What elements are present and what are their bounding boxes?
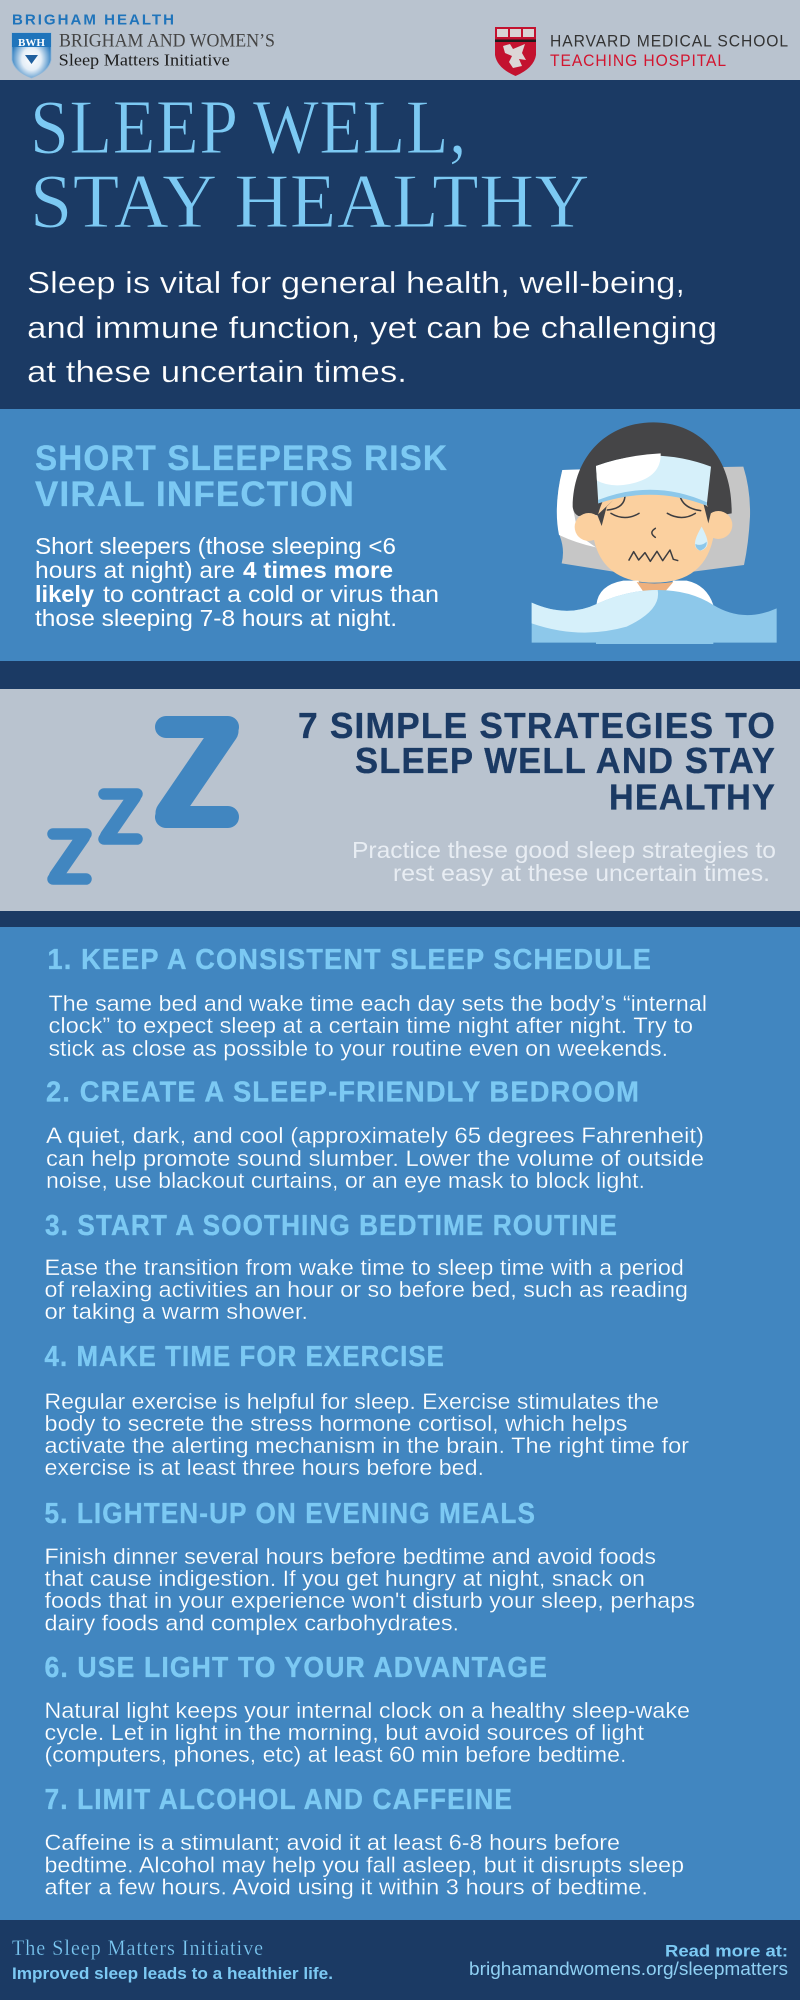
face bbox=[575, 493, 732, 583]
strategy 5: that cause indigestion. If you get hungry at night, snack on bbox=[44, 1566, 645, 1591]
text: practice strategies: rest easy at these uncertain times. bbox=[393, 860, 770, 886]
heading: short sleepers: VIRAL INFECTION bbox=[35, 475, 355, 514]
heading: 7 strategies: SLEEP WELL AND STAY bbox=[355, 740, 776, 781]
intro text: Sleep is vital for general health, well-being, bbox=[27, 265, 685, 300]
strategy 2: A quiet, dark, and cool (approximately 65 degrees Fahrenheit) bbox=[46, 1123, 704, 1148]
footer tagline: The Sleep Matters Initiative bbox=[12, 1935, 264, 1960]
strategy 7 bbox=[44, 1784, 684, 1900]
heading: short sleepers bbox=[35, 439, 448, 514]
strategy 4: activate the alerting mechanism in the brain. The right time for bbox=[44, 1433, 690, 1458]
heading: short sleepers: SHORT SLEEPERS RISK bbox=[35, 439, 448, 478]
strategy 6 bbox=[44, 1652, 690, 1767]
panel: short sleepers bbox=[0, 409, 800, 661]
footer link: brighamandwomens.org/sleepmatters bbox=[469, 1958, 788, 1979]
icon: zzz bbox=[53, 727, 228, 879]
logo: Harvard Medical School: TEACHING HOSPITAL bbox=[550, 51, 727, 70]
strategy 3: 3. START A SOOTHING BEDTIME ROUTINE bbox=[45, 1210, 618, 1242]
cold towel bbox=[596, 453, 711, 506]
text: short sleepers body: 4 times more bbox=[243, 557, 393, 583]
logo: Brigham Health: BRIGHAM AND WOMEN’S bbox=[59, 32, 275, 52]
text: practice strategies bbox=[352, 837, 776, 886]
strategy 4: Regular exercise is helpful for sleep. Exercise stimulates the bbox=[44, 1389, 659, 1414]
intro text bbox=[27, 265, 717, 389]
heading: 7 strategies: HEALTHY bbox=[609, 776, 776, 818]
strategy 1: The same bed and wake time each day sets the body’s “internal bbox=[48, 991, 707, 1016]
strategy 6: (computers, phones, etc) at least 60 min before bedtime. bbox=[44, 1742, 626, 1767]
strategy 1: clock” to expect sleep at a certain time night after night. Try to bbox=[48, 1013, 693, 1038]
text: practice strategies: Practice these good sleep strategies to bbox=[352, 837, 776, 863]
icon: BWH shield bbox=[12, 33, 51, 78]
text: short sleepers body bbox=[35, 533, 439, 631]
strategy 7: after a few hours. Avoid using it within 3 hours of bedtime. bbox=[44, 1874, 648, 1900]
strategy 4: exercise is at least three hours before bed. bbox=[44, 1455, 484, 1480]
strategy 4: body to secrete the stress hormone cortisol, which helps bbox=[44, 1411, 628, 1436]
illustration: sick sleeper bbox=[532, 422, 777, 644]
strategy 4 bbox=[44, 1341, 690, 1480]
strategy 5: dairy foods and complex carbohydrates. bbox=[44, 1610, 459, 1636]
strategy 3: or taking a warm shower. bbox=[44, 1299, 308, 1324]
strategy 6: 6. USE LIGHT TO YOUR ADVANTAGE bbox=[44, 1652, 548, 1684]
footer link bbox=[469, 1942, 788, 1979]
strategy 3: of relaxing activities an hour or so before bed, such as reading bbox=[44, 1277, 688, 1302]
strategy 2: noise, use blackout curtains, or an eye mask to block light. bbox=[46, 1168, 645, 1193]
intro text: at these uncertain times. bbox=[27, 354, 407, 389]
strategy 3: Ease the transition from wake time to sleep time with a period bbox=[44, 1255, 684, 1280]
blanket bbox=[532, 590, 777, 644]
icon: Harvard shield bbox=[495, 27, 536, 76]
logo: Brigham Health: BRIGHAM HEALTH bbox=[12, 12, 176, 28]
strategy 5: 5. LIGHTEN-UP ON EVENING MEALS bbox=[44, 1498, 536, 1530]
footer link: Read more at: bbox=[665, 1942, 788, 1960]
panel: logo header bbox=[0, 0, 800, 80]
strategy 6: Natural light keeps your internal clock on a healthy sleep-wake bbox=[44, 1698, 690, 1723]
text: short sleepers body: likely bbox=[35, 581, 94, 607]
strategy 2: 2. CREATE A SLEEP-FRIENDLY BEDROOM bbox=[46, 1077, 640, 1109]
icon: BWH shield: BWH bbox=[18, 38, 45, 49]
heading: 7 strategies: 7 SIMPLE STRATEGIES TO bbox=[298, 705, 776, 746]
panel: 7 strategies intro bbox=[0, 689, 800, 911]
text: short sleepers body: to contract a cold or virus than bbox=[103, 581, 439, 607]
text: short sleepers body: Short sleepers (those sleeping <6 bbox=[35, 533, 396, 559]
logo: Harvard Medical School bbox=[495, 27, 789, 76]
strategy 1: 1. KEEP A CONSISTENT SLEEP SCHEDULE bbox=[48, 944, 652, 976]
strategy 5: Finish dinner several hours before bedtime and avoid foods bbox=[44, 1544, 656, 1569]
footer tagline: Improved sleep leads to a healthier life. bbox=[12, 1965, 333, 1983]
panel: title banner bbox=[0, 80, 800, 409]
panel: footer bbox=[0, 1920, 800, 2000]
strategy 3 bbox=[44, 1210, 688, 1324]
hair bbox=[573, 422, 732, 526]
title: SLEEP WELL, bbox=[30, 84, 467, 170]
divider band bbox=[0, 911, 800, 927]
strategy 6: cycle. Let in light in the morning, but avoid sources of light bbox=[44, 1720, 645, 1745]
footer tagline bbox=[12, 1935, 333, 1983]
logo: Brigham Health bbox=[12, 12, 275, 78]
neck and shirt bbox=[596, 581, 713, 605]
panel: strategies list bbox=[0, 927, 800, 1920]
strategy 1: stick as close as possible to your routine even on weekends. bbox=[48, 1036, 668, 1061]
strategy 7: 7. LIMIT ALCOHOL AND CAFFEINE bbox=[44, 1784, 513, 1816]
strategy 2 bbox=[46, 1077, 704, 1193]
pillow bbox=[557, 467, 750, 572]
title bbox=[30, 84, 590, 244]
logo: Brigham Health: Sleep Matters Initiative bbox=[59, 51, 230, 70]
title: STAY HEALTHY bbox=[30, 158, 590, 244]
divider band bbox=[0, 661, 800, 689]
strategy 4: 4. MAKE TIME FOR EXERCISE bbox=[44, 1341, 445, 1373]
strategy 1 bbox=[48, 944, 707, 1061]
intro text: and immune function, yet can be challenging bbox=[27, 310, 717, 345]
text: short sleepers body: those sleeping 7-8 hours at night. bbox=[35, 605, 397, 631]
strategy 7: bedtime. Alcohol may help you fall asleep, but it disrupts sleep bbox=[44, 1852, 684, 1878]
heading: 7 strategies bbox=[298, 705, 776, 818]
strategy 2: can help promote sound slumber. Lower the volume of outside bbox=[46, 1146, 704, 1171]
icon: tear drop bbox=[695, 527, 708, 551]
strategy 5: foods that in your experience won't disturb your sleep, perhaps bbox=[44, 1588, 695, 1613]
strategy 5 bbox=[44, 1498, 695, 1636]
strategy 7: Caffeine is a stimulant; avoid it at least 6-8 hours before bbox=[44, 1830, 620, 1855]
text: short sleepers body: hours at night) are bbox=[35, 557, 235, 583]
